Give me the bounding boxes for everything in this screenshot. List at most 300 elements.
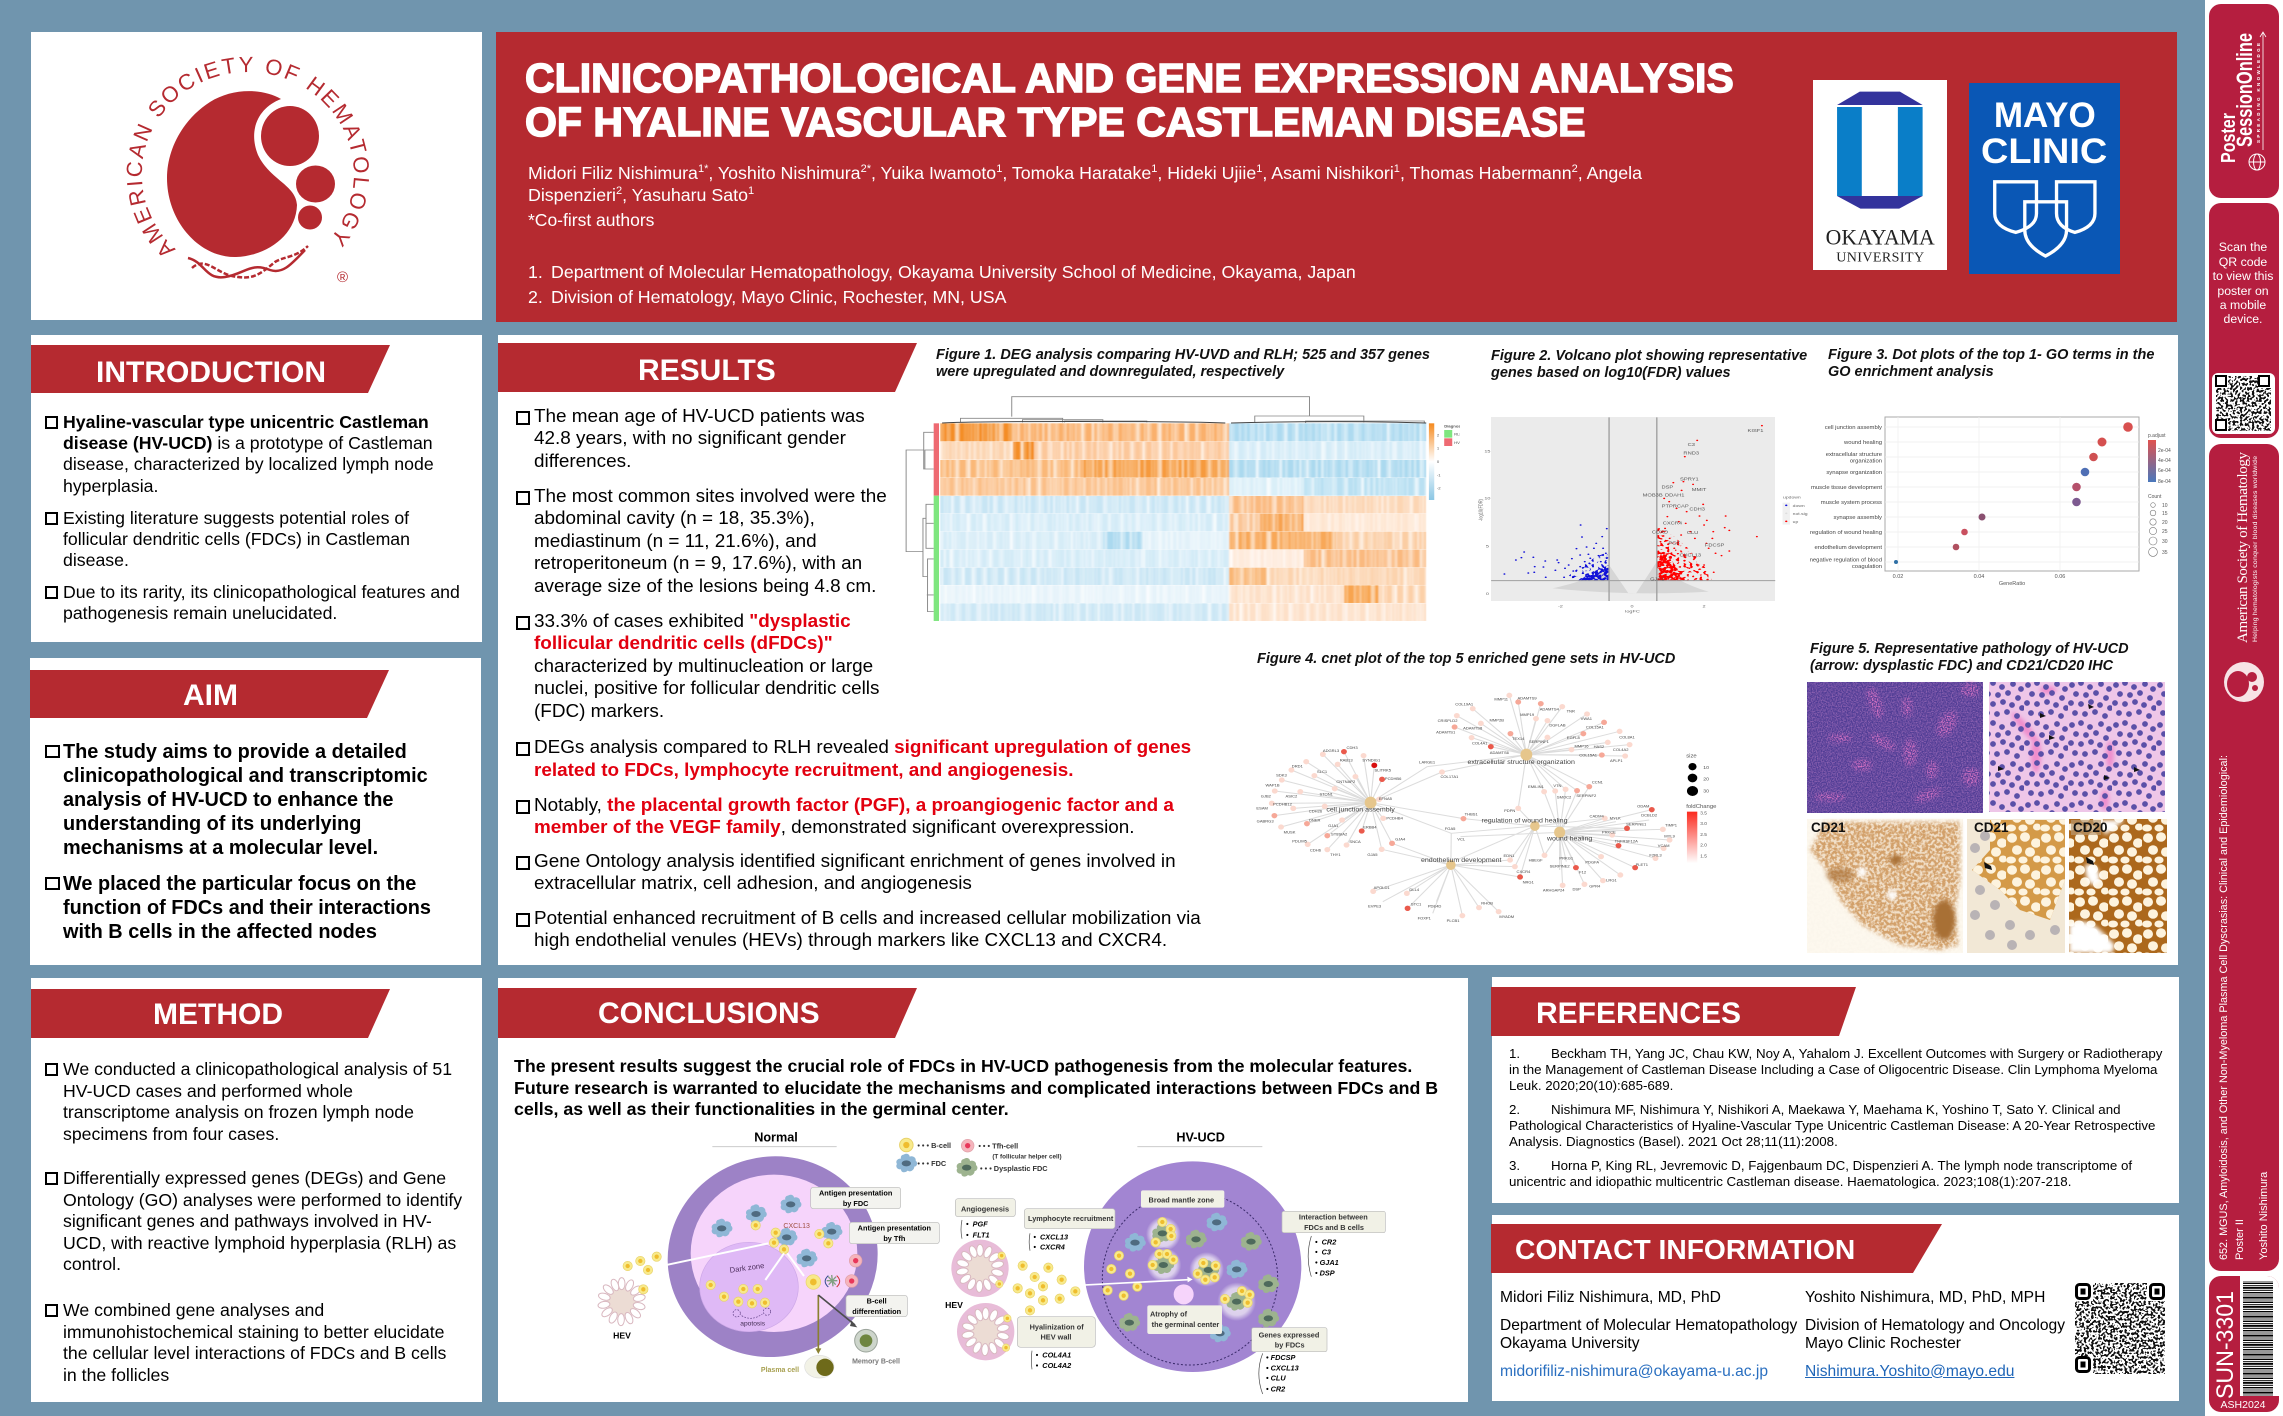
normal follicle text: apotosis [740, 1320, 766, 1327]
heatmap colour scale [1429, 423, 1441, 500]
size legend: 20 [1703, 777, 1709, 782]
gene labels: ADAMTS4 [1540, 707, 1560, 712]
heading: method [31, 989, 390, 1038]
normal FDCs [1125, 1213, 1247, 1342]
callout: lymphocyte recruitment [1024, 1209, 1115, 1252]
count legend: 35 [2162, 550, 2168, 556]
GO term labels: endothelium development [1815, 545, 1882, 551]
callout: FDC–B cell interaction [1282, 1211, 1385, 1277]
legend: down [1793, 504, 1805, 508]
bullet: sites: The most common sites involved were the [534, 486, 887, 506]
heading: introduction [31, 345, 390, 393]
gene labels: SERPINF1 [1529, 739, 1549, 744]
bullet: immunohistochemistry: immunohistochemical staining to better elucidate [63, 1322, 444, 1342]
gene labels: MMP11 [1494, 697, 1508, 702]
axis labels: 0 [1486, 592, 1489, 597]
gene labels: RAB13 [1340, 758, 1353, 762]
gene labels: CXCL13 [1680, 553, 1701, 558]
icon: ASH cell emblem [167, 91, 335, 257]
gene labels: DDAH1 [1665, 493, 1685, 498]
co-first authors note: *Co-first authors [528, 210, 654, 230]
gene labels: PDE4D [1428, 904, 1442, 908]
fold change legend: 3.5 [1700, 811, 1707, 816]
callout: atrophy of germinal centre: the germinal center [1152, 1320, 1219, 1329]
diagram: normal follicle [597, 1131, 939, 1381]
GO term labels: extracellular structure [1826, 452, 1883, 458]
legend: cell types: (T follicular helper cell) [992, 1153, 1062, 1160]
reference 2: Pathological Characteristics of Hyaline-Vascular Type Unicentric Castleman Disease: A 20-Year Retrospective [1509, 1118, 2155, 1133]
figure 2 caption: genes based on log10(FDR) values [1491, 365, 1731, 381]
bullet: age: The mean age of HV-UCD patients was [534, 406, 865, 426]
bullet: HV-UCD definition: disease, characterized by localized lymph node [63, 454, 434, 474]
gene labels: SPRY1 [1680, 477, 1699, 482]
gene labels: MMIT [1692, 488, 1706, 493]
count legend: 10 [2162, 503, 2168, 509]
reference 1 [1509, 1046, 2162, 1093]
size legend [1686, 754, 1709, 796]
gene labels: CDH3 [1689, 507, 1705, 512]
size legend: 30 [1703, 789, 1709, 795]
callout: genes expressed by FDCs: • CLU [1266, 1374, 1286, 1383]
hub labels: extracellular structure organization [1467, 759, 1575, 766]
gene labels: CDXD [1652, 530, 1669, 535]
legend: cell types [896, 1138, 1062, 1177]
normal follicle text: CXCL13 [783, 1223, 810, 1230]
gene labels: THBS1 [1465, 812, 1478, 817]
authors: Dispenzieri2, Yasuharu Sato1 [528, 185, 754, 205]
gene labels: F12 [1579, 870, 1586, 874]
legend: cell types: • • • Tfh-cell [978, 1141, 1018, 1150]
bullet: study focus: function of FDCs and their interactions [63, 897, 431, 919]
contact: Midori Nishimura: Department of Molecular Hematopathology [1500, 1317, 1797, 1334]
figure 1: heatmap [906, 396, 1460, 621]
authors: Midori Filiz Nishimura1*, Yoshito Nishimura2*, Yuika Iwamoto1, Tomoka Haratake1, Hideki Ujiie1, Asami Nishikori1, Thomas Habermann2, Angela [528, 163, 1642, 183]
callout: angiogenesis: • FLT1 [966, 1230, 990, 1239]
heading: conclusions: CONCLUSIONS [598, 997, 820, 1030]
hub labels: regulation of wound healing [1482, 818, 1568, 825]
gene labels: COL15A1 [1586, 725, 1604, 730]
arrows: B cell differentiation [815, 1295, 857, 1354]
panel: contact information [1492, 1215, 2179, 1401]
threshold lines [1491, 417, 1775, 601]
gene labels: DSP [1661, 485, 1674, 490]
callout: antigen presentation by Tfh: by Tfh [883, 1234, 906, 1243]
bullet: age: differences. [534, 451, 631, 472]
bullet: DEG analysis: UCD, with reactive lymphoid hyperplasia (RLH) as [63, 1233, 456, 1253]
heading: introduction: INTRODUCTION [96, 356, 326, 389]
callout: antigen presentation by FDC: Antigen presentation [819, 1189, 893, 1198]
gene labels: MUSK [1284, 830, 1296, 834]
panel: ASH session information: Yoshito Nishimura [2258, 1171, 2270, 1260]
gene labels: ADAMTS8 [1463, 726, 1482, 730]
icon: Okayama University logo [1813, 80, 1947, 270]
callout: antigen presentation by FDC [811, 1187, 901, 1209]
bullet: PGF: member of the VEGF family, demonstrated significant overexpression. [534, 817, 1135, 838]
axis labels: 15 [1484, 449, 1491, 454]
label: HV-UCD [1137, 1131, 1262, 1147]
text: conclusion statement [514, 1056, 1438, 1119]
GO term labels [1810, 425, 1883, 570]
affiliations: 2. [528, 286, 543, 306]
callout: angiogenesis: Angiogenesis [961, 1204, 1009, 1213]
figure 3 caption: GO enrichment analysis [1828, 364, 1994, 380]
legend: not.sig [1793, 512, 1808, 516]
gene labels: WAP1B [1266, 783, 1280, 787]
reference 3 [1509, 1158, 2132, 1189]
bullet: DEG analysis: Differentially expressed genes (DEGs) and Gene [63, 1168, 446, 1188]
reference 2: Nishimura MF, Nishimura Y, Nishikori A, Maekawa Y, Maehama K, Yoshino T, Sato Y. Clinical and [1551, 1102, 2121, 1117]
affiliations: 1. [528, 262, 543, 282]
gene labels: HBEGF [1529, 858, 1543, 863]
affiliations [528, 262, 1356, 306]
callout: genes expressed by FDCs: • FDCSP [1266, 1353, 1296, 1362]
GO term labels: muscle tissue development [1811, 485, 1882, 491]
callout: atrophy of germinal centre: Atrophy of [1150, 1310, 1188, 1319]
bullet: immunohistochemistry [45, 1300, 446, 1385]
gene labels: CXCR4 [1517, 869, 1531, 874]
gene labels: FOXP1 [1418, 916, 1431, 921]
gene labels: TNR [1567, 709, 1575, 713]
B cells [1013, 1217, 1254, 1315]
GO term labels: negative regulation of blood [1810, 558, 1882, 564]
gene labels: MMP16 [1575, 744, 1588, 748]
contact: Midori Nishimura: midorifiliz-nishimura@okayama-u.ac.jp [1500, 1363, 1768, 1380]
gene labels: MOB3B [1643, 493, 1663, 498]
bullet: dFDCs: follicular dendritic cells (dFDCs)" [534, 633, 833, 654]
size legend: 10 [1703, 765, 1709, 771]
micrograph: CD20 high power [2069, 819, 2167, 953]
bullet: DEG analysis: Ontology (GO) analyses were performed to identify [63, 1190, 462, 1210]
bullet: sites: abdominal cavity (n = 18, 35.3%), [534, 508, 815, 529]
reference 1: Beckham TH, Yang JC, Chau KW, Noy A, Yahalom J. Excellent Outcomes with Surgery or Radiotherapy [1551, 1046, 2162, 1061]
bullet: PGF: Notably, the placental growth factor (PGF), a proangiogenic factor and a [534, 794, 1174, 816]
gene labels: SNCA [1349, 839, 1361, 844]
figure 3: dot plot [1810, 416, 2171, 587]
title: OF HYALINE VASCULAR TYPE CASTLEMAN DISEASE [525, 99, 1585, 145]
fold change legend: 2.0 [1700, 843, 1707, 848]
fold change legend: 1.5 [1700, 854, 1707, 858]
count legend [2148, 494, 2168, 556]
plot background [1491, 417, 1775, 601]
axis labels: -log10(FDR) [1478, 499, 1485, 521]
gene labels: ADAMTS6 [1490, 750, 1509, 755]
axis labels: 0 [1630, 604, 1634, 609]
gene labels: GJA1 [1328, 823, 1338, 828]
plot frame [1885, 417, 2139, 571]
callout: antigen presentation by Tfh: Antigen presentation [858, 1224, 931, 1233]
bullet: sites: average size of the lesions being 4.8 cm. [534, 576, 876, 597]
upregulated genes [1657, 426, 1762, 581]
bullet: cases: specimens from four cases. [63, 1124, 279, 1144]
bullet: literature [45, 508, 410, 570]
bullet: cases: transcriptome analysis on frozen lymph node [63, 1102, 414, 1122]
diagram: normal versus HV-UCD germinal centre [598, 1131, 1386, 1394]
axis labels: 0.02 [1893, 574, 1903, 580]
callout: genes expressed by FDCs: Genes expressed [1259, 1330, 1319, 1339]
heading: aim: AIM [183, 679, 238, 712]
contact: Yoshito Nishimura: Nishimura.Yoshito@mayo.edu [1805, 1363, 2014, 1380]
legend: cell types: • • • Dysplastic FDC [980, 1164, 1048, 1173]
panel: PosterSessionOnline logo: Poster [2218, 113, 2240, 163]
bullet: DEG analysis: control. [63, 1254, 121, 1274]
gene labels: F2RL3 [1649, 853, 1662, 857]
gene labels: APOLD1 [1374, 885, 1390, 890]
callout: B-cell differentiation: B-cell [867, 1297, 887, 1306]
panel: QR prompt: device. [2224, 312, 2262, 326]
figure 4: cnet plot [1256, 692, 1716, 923]
bullet: cases: We conducted a clinicopathological analysis of 51 [63, 1059, 452, 1079]
bullet: cases [45, 1059, 452, 1144]
panel: PosterSessionOnline logo: SPREADING KNOWLEDGE [2256, 43, 2261, 143]
bullet: B cell recruitment: high endothelial venules (HEVs) through markers like CXCL13 and CXCR4. [534, 930, 1167, 951]
gene labels: DCBLD2 [1641, 813, 1657, 817]
figure 2: volcano plot [1478, 417, 1808, 614]
gene labels: PDPN [1504, 808, 1516, 813]
gene labels: COL17A1 [1440, 774, 1458, 779]
arrows: B cell migration [658, 1243, 804, 1280]
icon: DNA helix [188, 246, 308, 277]
gene labels: GPR4 [1589, 884, 1601, 888]
enlarged mantle zone [1084, 1161, 1301, 1372]
downregulated genes [1504, 525, 1609, 581]
contact: Midori Nishimura: Midori Filiz Nishimura, MD, PhD [1500, 1289, 1721, 1306]
gene labels: VCAM [1658, 843, 1669, 848]
panel: conclusions [498, 978, 1468, 1402]
gene labels: EDN1 [1504, 853, 1514, 858]
heading: contact information [1491, 1224, 1942, 1273]
icon: Mayo Clinic logo: MAYO [1994, 96, 2096, 135]
heatmap colour scale: -1 [1437, 473, 1441, 477]
gene labels: ADGRL3 [1323, 748, 1339, 753]
gene labels: RHOB [1481, 901, 1493, 906]
callout: antigen presentation by Tfh [849, 1222, 939, 1244]
gene labels: ST8SIA2 [1331, 832, 1347, 836]
gene labels: RND3 [1683, 451, 1699, 456]
gene labels: PDGFA [1585, 860, 1600, 865]
figure 1 caption: Figure 1. DEG analysis comparing HV-UVD and RLH; 525 and 357 genes [936, 347, 1430, 363]
axis labels: 0.06 [2055, 574, 2065, 580]
text: conclusion statement: Future research is warranted to elucidate the mechanisms and complicated interactions between FDCs and B [514, 1078, 1438, 1098]
heading: references [1491, 987, 1856, 1036]
atrophic centre circle [1174, 1284, 1194, 1304]
gene labels: LRG1 [1606, 878, 1617, 882]
count legend: 15 [2162, 511, 2168, 517]
GO term labels: cell junction assembly [1825, 425, 1882, 431]
legend: cell types: • • • FDC [917, 1159, 947, 1168]
figure 5 caption [1810, 641, 2129, 674]
gene labels: EGFL8 [1567, 735, 1580, 740]
follicle layers [645, 1133, 900, 1381]
p.adjust legend: 4e-04 [2158, 458, 2171, 464]
gene labels: SYNDIG1 [1362, 758, 1380, 763]
gene labels: SLC1 [1317, 769, 1327, 774]
gene labels: GJB2 [1261, 794, 1271, 798]
bullet: immunohistochemistry: We combined gene analyses and [63, 1300, 324, 1320]
reference 1: Leuk. 2020;20(10):685-689. [1509, 1078, 1673, 1093]
gene labels: C3 [1688, 443, 1695, 448]
gene labels: CLU [1687, 531, 1699, 536]
axis labels: 10 [1484, 496, 1491, 501]
micrograph: CD21 high power [1967, 819, 2065, 953]
gene labels: SERPINE1 [1626, 822, 1646, 827]
legend: updown [1783, 495, 1801, 499]
gene labels: MYLK [1610, 816, 1621, 820]
bullet: study aim: analysis of HV-UCD to enhance the [63, 789, 393, 811]
gene labels: DNER [1309, 818, 1321, 822]
gene labels: DSP [1573, 887, 1581, 892]
axis labels: 2 [1703, 604, 1706, 609]
affiliations: Department of Molecular Hematopathology, Okayama University School of Medicine, Okayama, Japan [551, 262, 1356, 282]
panel: introduction [31, 335, 482, 642]
GO term labels: wound healing [1843, 440, 1882, 446]
bullet: literature: disease. [63, 550, 129, 570]
text: registered mark: ® [337, 269, 348, 286]
immune synapse [806, 1254, 862, 1289]
reference 2: Analysis. Diagnostics (Basel). 2021 Oct 28;11(11):2008. [1509, 1134, 1838, 1149]
heatmap legend [1444, 424, 1470, 446]
gene labels: EVPE3 [1368, 904, 1381, 909]
gene labels: KISF1 [1748, 429, 1764, 434]
reference 1: 1. [1509, 1046, 1520, 1061]
callout: hyalinization: HEV wall [1041, 1333, 1071, 1342]
heading: results [498, 343, 917, 392]
legend [1783, 495, 1808, 525]
gene labels: VTN [1553, 783, 1562, 788]
contact: Yoshito Nishimura: Mayo Clinic Rochester [1805, 1335, 1961, 1352]
callout: broad mantle zone: Broad mantle zone [1149, 1195, 1214, 1204]
gene labels: ODAM [1637, 804, 1649, 808]
gene labels: PGF [1668, 541, 1680, 546]
figure 3 caption: Figure 3. Dot plots of the top 1- GO terms in the [1828, 347, 2154, 363]
heatmap colour scale: -2 [1437, 486, 1441, 491]
contact: Yoshito Nishimura: Division of Hematology and Oncology [1805, 1317, 2065, 1334]
count legend: 30 [2162, 539, 2168, 545]
GO term labels: regulation of wound healing [1810, 530, 1882, 536]
panel: ASH session information: Helping hematologists conquer blood diseases worldwide [2252, 456, 2259, 642]
panel: aim [30, 658, 481, 965]
bullet: immunohistochemistry: in the follicles [63, 1365, 169, 1385]
GO term dots [1894, 422, 2133, 564]
bullet: cases: HV-UCD cases and performed whole [63, 1081, 353, 1101]
gene labels: ADAMTS9 [1518, 696, 1537, 700]
gene labels: CRISPLD2 [1438, 718, 1457, 723]
callout: angiogenesis [955, 1199, 1015, 1239]
hub nodes [1365, 749, 1565, 870]
bullet: DEG upregulation [516, 737, 1191, 781]
bullet: dFDCs [516, 610, 879, 722]
heatmap colour scale: 2 [1437, 433, 1439, 437]
reference 3: unicentric and idiopathic multicentric Castleman disease. Haematologica. 2023;108(1):207-218. [1509, 1174, 2071, 1189]
contact: Yoshito Nishimura: Yoshito Nishimura, MD, PhD, MPH [1805, 1289, 2045, 1306]
panel: QR prompt: poster on [2217, 284, 2269, 298]
fold change legend: 3.0 [1700, 821, 1707, 826]
gene labels: FDCSP [1705, 543, 1725, 548]
figure 1 caption [936, 347, 1430, 380]
p.adjust legend: p.adjust [2148, 433, 2166, 439]
p.adjust legend: 6e-04 [2158, 468, 2171, 474]
gene labels: SERPINE2 [1550, 864, 1570, 868]
icon: Mayo Clinic logo [1969, 83, 2120, 274]
axis labels: logFC [1625, 609, 1640, 614]
icon: Mayo Clinic logo: CLINIC [1981, 132, 2107, 171]
micrograph: CD21 high power: CD21 [1974, 820, 2009, 835]
bullet: sites: mediastinum (n = 11, 21.6%), and [534, 531, 817, 552]
gene labels: GJA5 [1367, 852, 1378, 857]
axis labels [1478, 449, 1706, 614]
micrograph: CD21 low power: CD21 [1811, 820, 1846, 835]
gene labels: MMP2B [1490, 718, 1504, 722]
bullet: immunohistochemistry: the cellular level interactions of FDCs and B cells [63, 1343, 446, 1363]
icon: Okayama University logo: UNIVERSITY [1836, 251, 1924, 266]
micrograph: CD20 high power: CD20 [2073, 820, 2108, 835]
bullet: study aim: clinicopathological and transcriptomic [63, 765, 428, 787]
reference 3: 3. [1509, 1158, 1520, 1173]
bullet: B cell recruitment: Potential enhanced recruitment of B cells and increased cellular mobilization via [534, 908, 1201, 928]
gene labels: ESAM [1256, 806, 1268, 811]
bullet: study aim [45, 740, 428, 859]
gene labels: CDH3 [1347, 745, 1358, 750]
panel: ASH session information: 652. MGUS, Amyloidosis, and Other Non-Myeloma Plasma Cell Dyscrasias: Clinical and Epidemiological: [2218, 755, 2230, 1260]
callout: angiogenesis: • PGF [966, 1220, 988, 1229]
bullet: dFDCs: characterized by multinucleation or large [534, 656, 873, 677]
gene labels [1643, 429, 1764, 582]
normal follicle text: Dark zone [729, 1261, 765, 1275]
bullet: DEG analysis [45, 1168, 462, 1274]
callout: atrophy of germinal centre [1147, 1305, 1222, 1334]
label: HV-UCD: HV-UCD [1176, 1131, 1225, 1145]
figure 5 caption: (arrow: dysplastic FDC) and CD21/CD20 IHC [1810, 658, 2113, 674]
callout: FDC–B cell interaction: • GJA1 [1315, 1258, 1339, 1267]
figure 2 caption: Figure 2. Volcano plot showing representative [1491, 348, 1807, 364]
gene labels: LARGE1 [1419, 760, 1435, 765]
figure 5: pathology micrographs [1807, 680, 2167, 953]
heatmap cells [940, 423, 1426, 621]
bullet: sites: retroperitoneum (n = 9, 17.6%), with an [534, 553, 862, 574]
gene labels: COL8A1 [1619, 735, 1635, 739]
heading: aim [30, 670, 389, 718]
callout: FDC–B cell interaction: • CR2 [1315, 1237, 1336, 1246]
heading: results: RESULTS [638, 354, 776, 387]
gene labels: TNFRSF12A [1615, 839, 1638, 844]
gene labels: STC1 [1411, 902, 1421, 907]
legend: up [1793, 520, 1799, 524]
fold change legend: foldChange [1686, 804, 1716, 810]
arrow: lymphocyte recruitment [1072, 1277, 1193, 1286]
callout: FDC–B cell interaction: Interaction between [1299, 1213, 1368, 1222]
gene labels: COL19A1 [1455, 702, 1473, 707]
text: society name on ring: AMERICAN SOCIETY OF HEMATOLOGY [126, 56, 369, 256]
hub labels: wound healing [1546, 836, 1593, 843]
gene labels: PCDHB6 [1385, 776, 1401, 781]
gene labels: PCDHB12 [1273, 802, 1292, 807]
bullet: dFDCs: (FDC) markers. [534, 701, 664, 722]
bullet: dFDCs: nuclei, positive for follicular dendritic cells [534, 678, 879, 699]
gene labels: EMILIN1 [1528, 784, 1544, 789]
authors [528, 163, 1642, 205]
heatmap annotation bar [934, 423, 939, 621]
gene nodes [1272, 695, 1670, 916]
panel: title banner [496, 32, 2177, 322]
gene labels: PRKCE [1602, 830, 1616, 834]
gene labels: PLCB1 [1447, 918, 1460, 923]
gene labels: STON1 [1319, 792, 1333, 797]
reference 2 [1509, 1102, 2155, 1149]
micrograph: high-power H&E [1989, 682, 2165, 812]
count legend: Count [2148, 494, 2162, 500]
gene labels: DRD1 [1292, 764, 1303, 768]
heatmap dendrograms [906, 397, 1426, 612]
gene labels: GJA4 [1395, 837, 1406, 842]
